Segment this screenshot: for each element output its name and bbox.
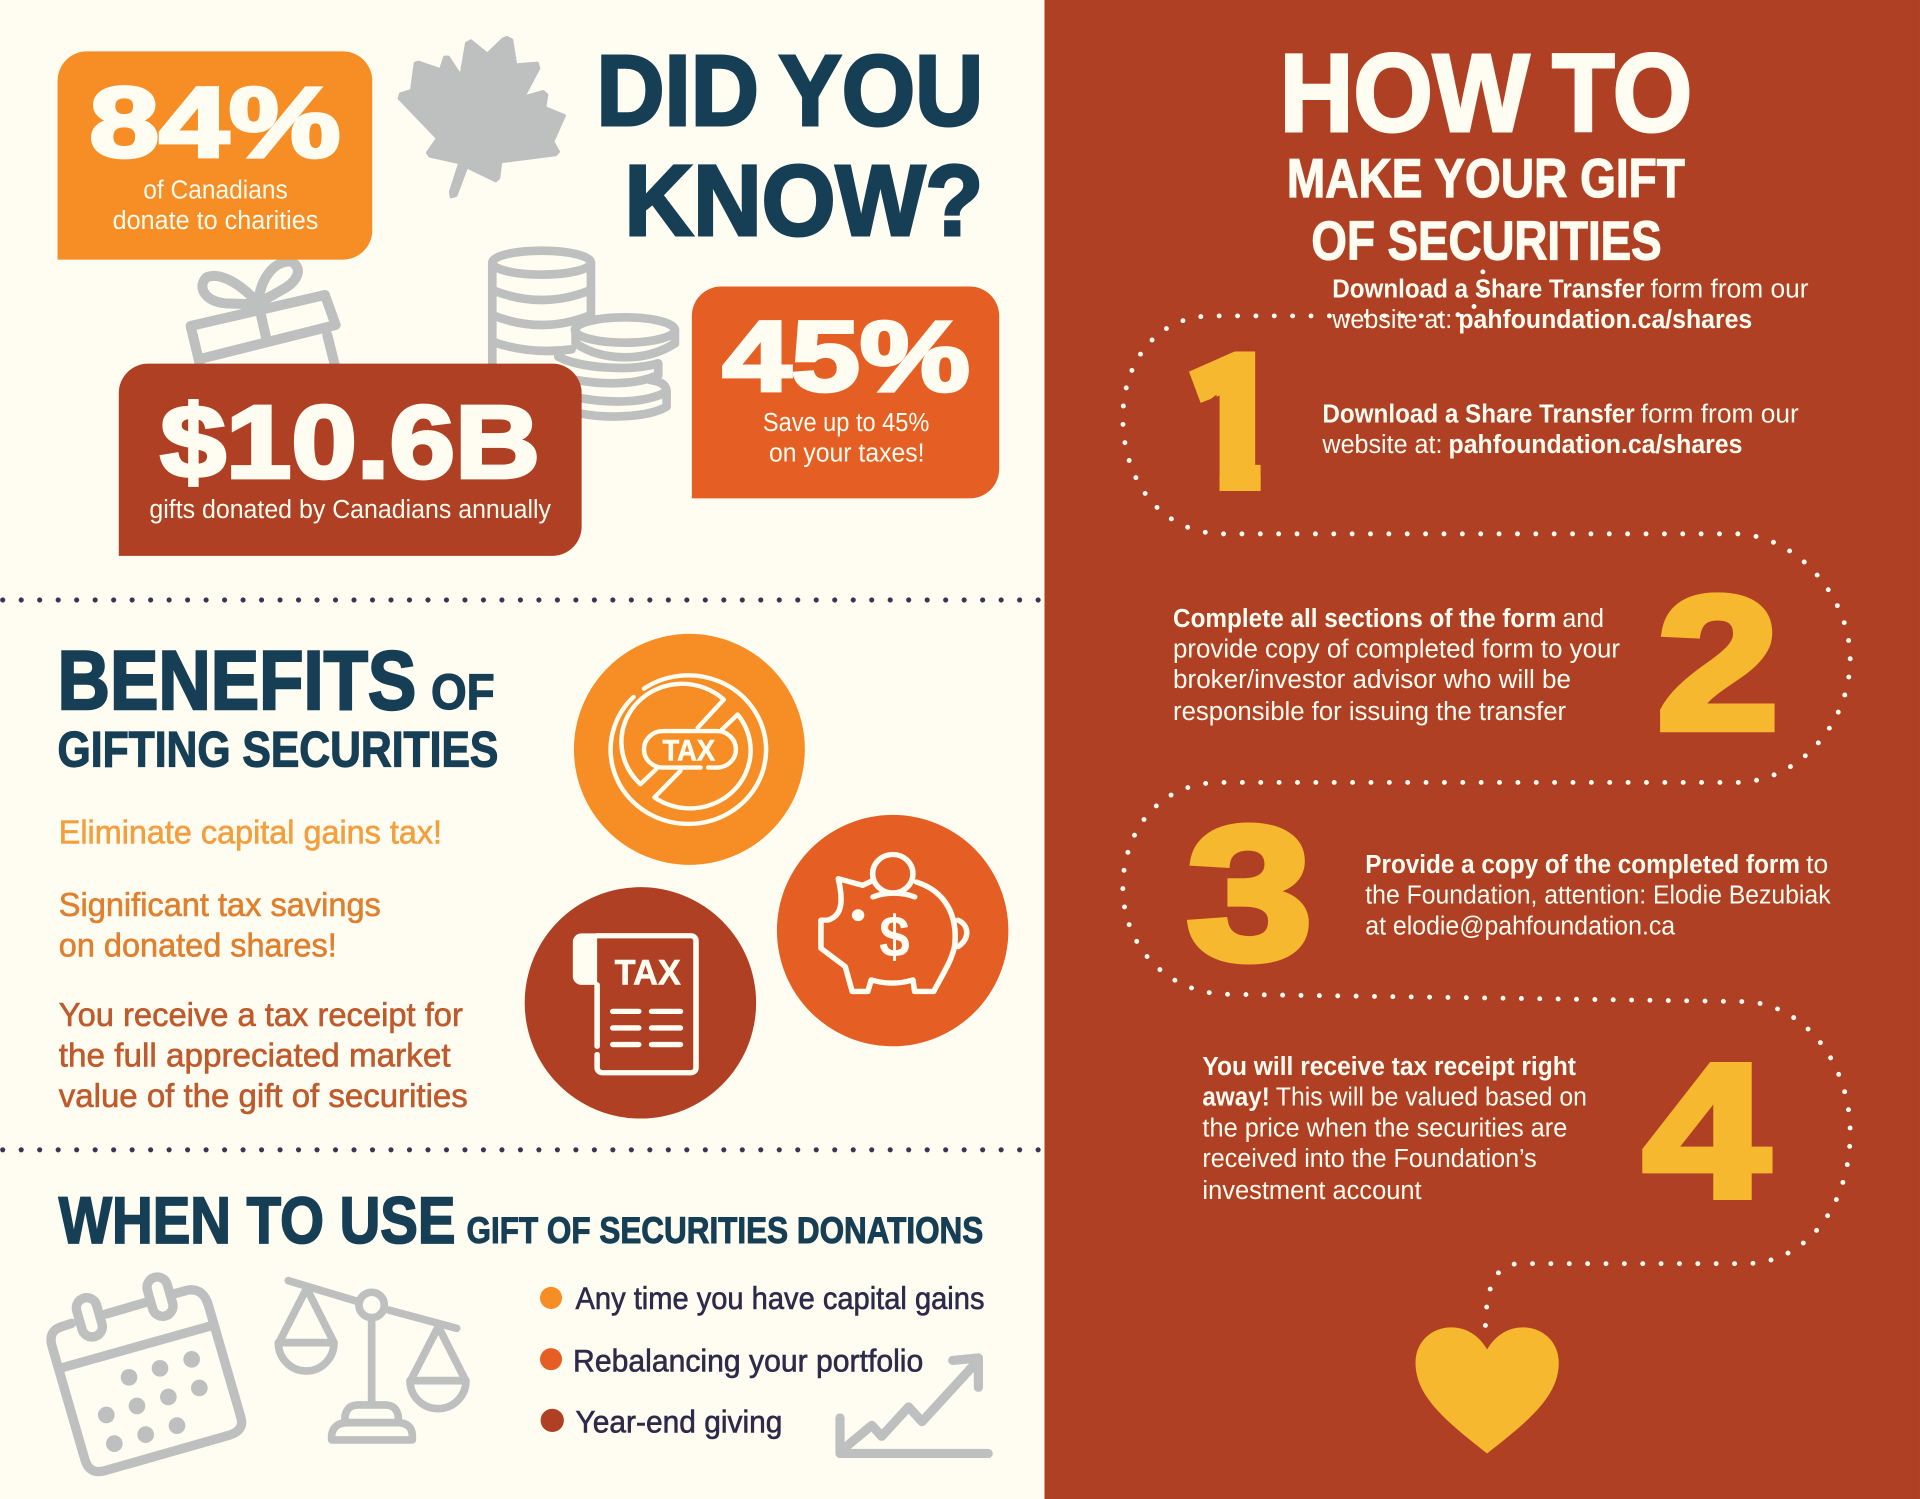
step 3 number: 3: [1187, 788, 1313, 1000]
step 4 text: This will be valued based on: [1276, 1084, 1587, 1112]
heading: benefits: OF: [431, 664, 495, 720]
icon: scales: [278, 1281, 466, 1440]
stat card: 84%: 84%: [89, 68, 340, 179]
list: when to use: Rebalancing your portfolio: [573, 1342, 923, 1378]
benefit: tax receipt: value of the gift of securities: [59, 1078, 468, 1115]
benefit: tax savings: [59, 887, 381, 964]
divider 2: [3, 1148, 1044, 1152]
step 2 text: [1173, 605, 1620, 726]
heading: did you know: DID YOU: [596, 35, 983, 147]
heading: when to use: GIFT OF SECURITIES DONATIONS: [467, 1210, 983, 1251]
panel: how to background: [1044, 0, 1920, 1499]
divider 1: [3, 598, 1044, 602]
heading: how to: [1280, 32, 1692, 272]
stat card: $10.6B: [119, 364, 582, 556]
step 4 text: You will receive tax receipt right: [1202, 1053, 1576, 1081]
step 2 text: broker/investor advisor who will be: [1173, 666, 1571, 694]
step 3 text: [1365, 851, 1831, 940]
stat card: 84%: [58, 51, 372, 260]
icon: no tax circle: TAX: [662, 734, 715, 767]
benefit: tax receipt: [59, 997, 468, 1115]
heading: did you know: KNOW?: [624, 145, 983, 257]
heading: when to use: WHEN TO USE: [59, 1184, 456, 1258]
benefit: eliminate capital gains: Eliminate capital gains tax!: [59, 815, 442, 852]
step 4 text: [1202, 1053, 1587, 1205]
step 3 text: Provide a copy of the completed form: [1365, 851, 1800, 879]
icon: piggy bank circle: $: [879, 904, 910, 969]
stat card: 45%: 45%: [722, 302, 970, 413]
stat card: 45%: Save up to 45%: [763, 409, 929, 437]
step 4 text: received into the Foundation’s: [1202, 1145, 1537, 1173]
stat card: $10.6B: gifts donated by Canadians annually: [149, 496, 551, 524]
step 1 text: form from our: [1641, 400, 1799, 428]
list: when to use: Any time you have capital gains: [576, 1280, 984, 1316]
step text: duplicate top: Download a Share Transfer: [1332, 276, 1644, 304]
heading: when to use: [59, 1184, 983, 1258]
stat card: 84%: donate to charities: [113, 207, 318, 235]
step 2 text: provide copy of completed form to your: [1173, 636, 1620, 664]
step 1 text: [1321, 400, 1799, 459]
benefit: tax savings: Significant tax savings: [59, 887, 381, 924]
step 2 text: responsible for issuing the transfer: [1173, 698, 1567, 726]
stat card: 45%: on your taxes!: [769, 440, 924, 468]
stat card: $10.6B: $10.6B: [160, 385, 540, 500]
step text: duplicate top: form from our: [1651, 276, 1809, 304]
step text: duplicate top: [1331, 276, 1809, 334]
benefit: tax receipt: the full appreciated market: [59, 1038, 451, 1075]
step text: duplicate top: website at:: [1331, 306, 1452, 334]
step 1 text: website at:: [1321, 431, 1442, 459]
step 3 text: the Foundation, attention: Elodie Bezubiak: [1365, 882, 1831, 910]
step text: duplicate top: pahfoundation.ca/shares: [1458, 306, 1752, 334]
step 1 text: pahfoundation.ca/shares: [1449, 431, 1742, 459]
icon: growth chart: [840, 1358, 988, 1453]
heading: benefits: GIFTING SECURITIES: [58, 722, 498, 778]
step 3 text: to: [1806, 851, 1828, 879]
benefit: tax receipt: You receive a tax receipt for: [59, 997, 463, 1034]
benefit: tax savings: on donated shares!: [59, 927, 337, 964]
heading: did you know: [596, 35, 983, 257]
step 4 number: 4: [1643, 1025, 1769, 1237]
step 2 text: Complete all sections of the form: [1173, 605, 1556, 633]
step 4 text: away!: [1202, 1084, 1270, 1112]
icon: tax document circle: [525, 887, 756, 1119]
heading: how to: MAKE YOUR GIFT: [1287, 147, 1685, 209]
step 1 number: 1: [1185, 309, 1278, 541]
icon: gift: [191, 262, 336, 368]
step 4 text: the price when the securities are: [1202, 1114, 1567, 1142]
heading: how to: HOW TO: [1280, 32, 1692, 155]
stat card: 45%: [692, 287, 999, 498]
step 2 text: and: [1562, 605, 1604, 633]
dotted path: [1123, 272, 1850, 1335]
step 4 text: investment account: [1202, 1177, 1422, 1205]
heading: how to: OF SECURITIES: [1311, 210, 1662, 272]
icon: coins: [492, 251, 675, 416]
list: when to use: Year-end giving: [576, 1404, 782, 1440]
heading: benefits: [58, 634, 498, 778]
step 1 text: Download a Share Transfer: [1322, 400, 1635, 428]
icon: maple leaf: [399, 38, 564, 197]
heading: benefits: BENEFITS: [58, 634, 416, 727]
icon: tax document circle: TAX: [615, 952, 681, 992]
step 3 text: at elodie@pahfoundation.ca: [1365, 912, 1676, 940]
icon: piggy bank circle: [777, 815, 1008, 1046]
list: when to use: [540, 1280, 984, 1440]
icon: calendar: [51, 1275, 242, 1472]
icon: no tax circle: [574, 634, 805, 865]
step 2 number: 2: [1657, 558, 1779, 770]
stat card: 84%: of Canadians: [143, 176, 288, 204]
icon: heart: [1416, 1327, 1559, 1453]
